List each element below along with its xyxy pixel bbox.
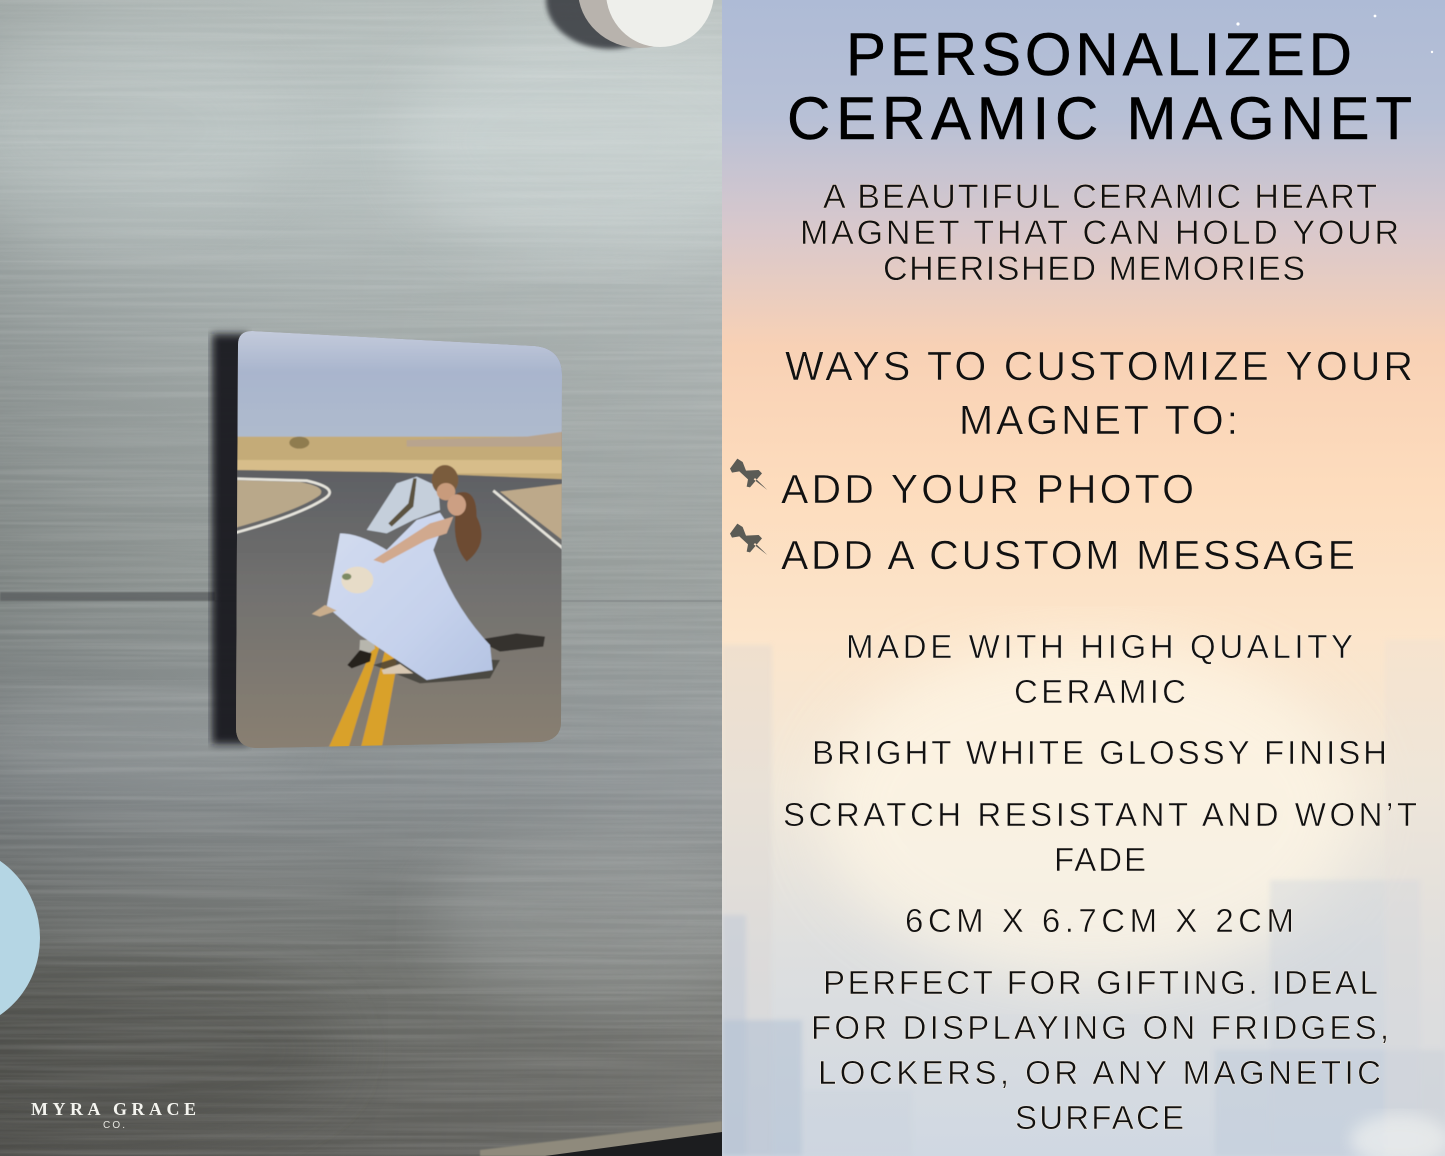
icon: push pin 2 [730, 524, 767, 555]
subtitle [800, 178, 1399, 288]
heading: ways to customize [785, 343, 1413, 443]
title [787, 21, 1412, 152]
shadow behind magnet [212, 334, 248, 744]
icon: push pin 1 [730, 459, 767, 490]
text: add a custom message: ADD A CUSTOM MESSAGE [781, 532, 1355, 578]
logo: Myra Grace Co. [31, 1099, 196, 1131]
logo: Myra Grace Co.: MYRA GRACE [31, 1099, 196, 1119]
text: product features [783, 628, 1417, 1136]
icon: blue round magnet at left edge [0, 846, 40, 1030]
feature: gifting: PERFECT FOR GIFTING. IDEAL [823, 964, 1378, 1001]
feature: scratch resistant: FADE [1054, 841, 1146, 878]
feature: scratch resistant: SCRATCH RESISTANT AND WON’T [783, 796, 1417, 833]
bride hair [455, 492, 482, 562]
sky [233, 327, 567, 440]
photo magnet [233, 327, 567, 753]
left verge [233, 480, 321, 528]
title: PERSONALIZED [846, 21, 1352, 88]
feature: dimensions: 6CM X 6.7CM X 2CM [905, 902, 1294, 939]
bouquet [341, 567, 373, 593]
feature: ceramic: CERAMIC [1014, 673, 1186, 710]
feature: gifting: SURFACE [1015, 1099, 1184, 1136]
subtitle: CHERISHED MEMORIES [883, 250, 1305, 288]
groom [367, 477, 440, 533]
road [233, 470, 567, 753]
road centre lines [328, 645, 380, 748]
right verge [500, 483, 562, 540]
feature: finish: BRIGHT WHITE GLOSSY FINISH [812, 734, 1387, 771]
sand [233, 437, 567, 480]
heading: ways to customize: MAGNET TO: [959, 397, 1238, 443]
text: add your photo: ADD YOUR PHOTO [781, 466, 1194, 512]
feature: gifting: FOR DISPLAYING ON FRIDGES, [811, 1009, 1389, 1046]
icon: white round magnet at top [546, 0, 714, 49]
list: customization options [730, 459, 1355, 578]
bride dress [327, 513, 493, 680]
dress shadow [477, 633, 545, 652]
logo: Myra Grace Co.: CO. [103, 1120, 125, 1131]
heading: ways to customize: WAYS TO CUSTOMIZE YOUR [785, 343, 1413, 389]
panel: sunset sky background [722, 0, 1445, 1156]
feature: scratch resistant [783, 796, 1417, 878]
feature: gifting [811, 964, 1389, 1136]
subtitle: A BEAUTIFUL CERAMIC HEART [823, 178, 1377, 216]
feature: gifting: LOCKERS, OR ANY MAGNETIC [818, 1054, 1381, 1091]
subtitle: MAGNET THAT CAN HOLD YOUR [800, 214, 1399, 252]
feature: ceramic [846, 628, 1353, 710]
title: CERAMIC MAGNET [787, 85, 1412, 152]
feature: ceramic: MADE WITH HIGH QUALITY [846, 628, 1353, 665]
panel: brushed metal fridge background [0, 0, 800, 1156]
